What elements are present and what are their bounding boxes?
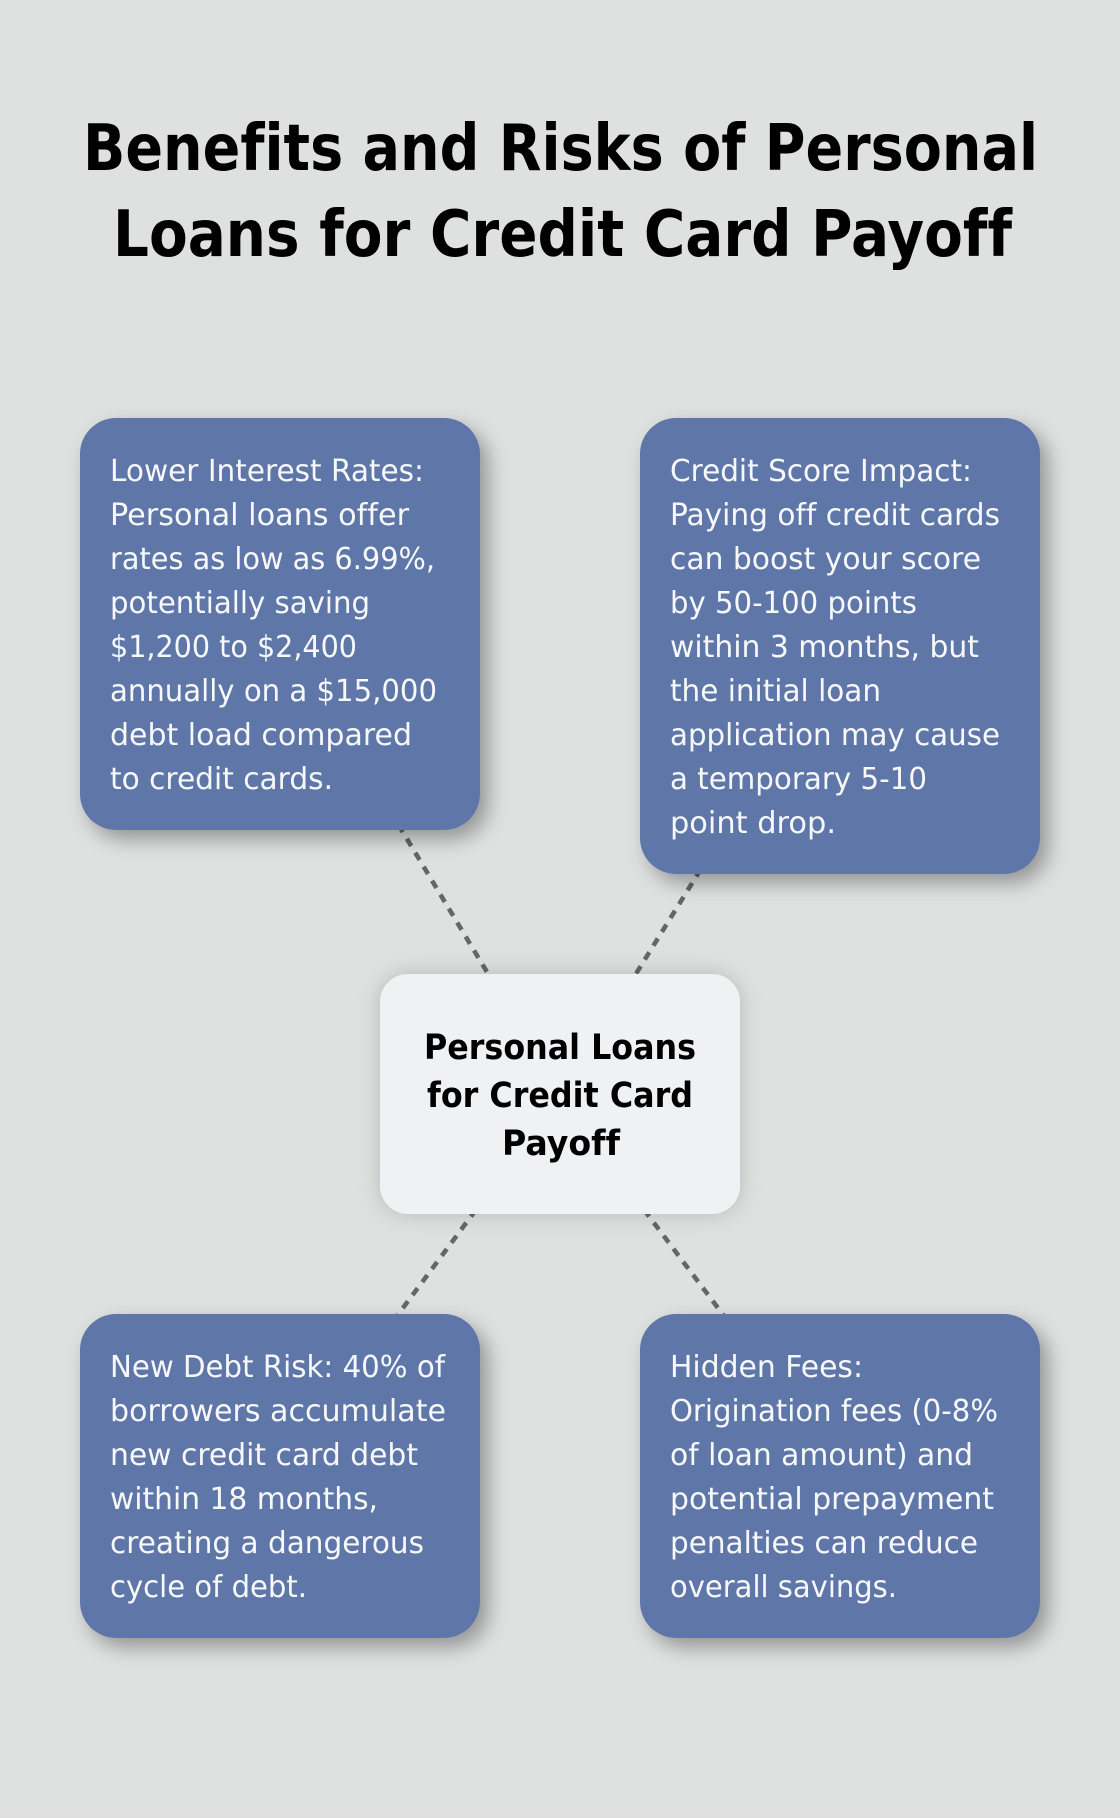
panel: hidden fees: potential prepayment <box>670 1482 994 1517</box>
panel: credit score impact: Credit Score Impact: <box>670 454 972 489</box>
panel: center topic: for Credit Card <box>427 1076 693 1116</box>
panel: new debt risk: New Debt Risk: 40% of <box>110 1350 446 1385</box>
panel: center topic: Payoff <box>502 1124 621 1164</box>
panel: lower interest rates: $1,200 to $2,400 <box>110 630 357 665</box>
panel: lower interest rates: potentially saving <box>110 586 370 621</box>
title: Loans for Credit Card Payoff <box>113 198 1013 272</box>
panel: credit score impact: Paying off credit cards <box>670 498 1000 533</box>
panel: new debt risk: new credit card debt <box>110 1438 418 1473</box>
panel: lower interest rates: Personal loans offer <box>110 498 409 533</box>
panel: lower interest rates: annually on a $15,000 <box>110 674 437 709</box>
panel: credit score impact: point drop. <box>670 806 836 841</box>
panel: hidden fees <box>640 1314 1040 1638</box>
panel: credit score impact: can boost your score <box>670 542 981 577</box>
title <box>83 112 1038 272</box>
panel: hidden fees: Origination fees (0-8% <box>670 1394 998 1429</box>
connector: center to bottom left card <box>397 1211 475 1316</box>
panel: lower interest rates: debt load compared <box>110 718 412 753</box>
connector: top left card to center <box>401 829 490 977</box>
panel: new debt risk: cycle of debt. <box>110 1570 307 1605</box>
panel: center topic <box>380 974 740 1214</box>
panel: new debt risk <box>80 1314 480 1638</box>
panel: hidden fees: overall savings. <box>670 1570 897 1605</box>
panel: credit score impact: application may cause <box>670 718 1000 753</box>
panel: hidden fees: of loan amount) and <box>670 1438 973 1473</box>
connector: top right card to center <box>634 872 699 977</box>
panel: new debt risk: borrowers accumulate <box>110 1394 446 1429</box>
panel: center topic: Personal Loans <box>424 1028 696 1068</box>
panel: lower interest rates: to credit cards. <box>110 762 333 797</box>
panel: hidden fees: penalties can reduce <box>670 1526 978 1561</box>
panel: credit score impact: a temporary 5-10 <box>670 762 927 797</box>
panel: hidden fees: Hidden Fees: <box>670 1350 863 1385</box>
panel: lower interest rates: rates as low as 6.99%, <box>110 542 435 577</box>
panel: lower interest rates: Lower Interest Rates: <box>110 454 424 489</box>
panel: credit score impact: by 50-100 points <box>670 586 917 621</box>
panel: lower interest rates <box>80 418 480 830</box>
panel: credit score impact: the initial loan <box>670 674 881 709</box>
panel: new debt risk: creating a dangerous <box>110 1526 424 1561</box>
panel: new debt risk: within 18 months, <box>110 1482 378 1517</box>
panel: credit score impact <box>640 418 1040 874</box>
connector: center to bottom right card <box>645 1211 724 1316</box>
panel: credit score impact: within 3 months, but <box>670 630 979 665</box>
